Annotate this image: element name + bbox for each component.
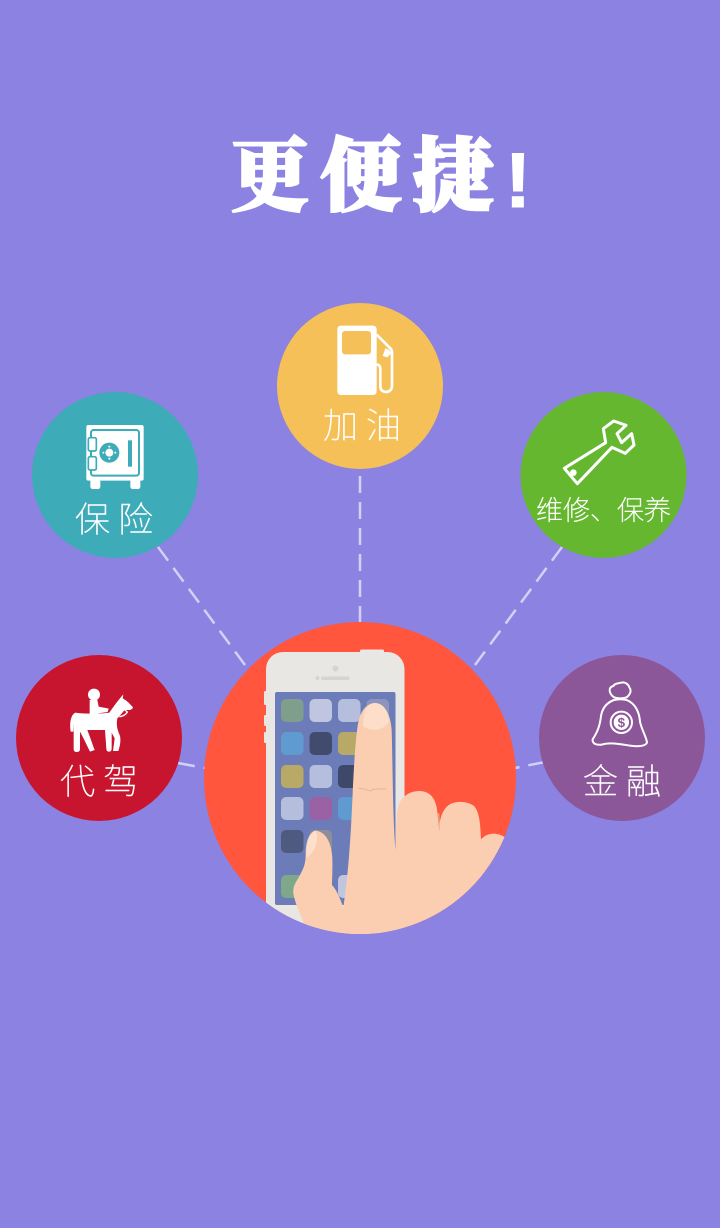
label: 代 xyxy=(60,763,95,802)
phone xyxy=(264,650,404,934)
circle: 加油: 油 xyxy=(366,407,401,446)
title: 便 xyxy=(321,134,401,222)
icon: horse and rider xyxy=(70,689,133,752)
icon: fuel pump xyxy=(337,326,392,395)
circle: 维修、保养 xyxy=(520,392,686,558)
central phone and hand illustration xyxy=(204,622,516,934)
circle: 金融 xyxy=(539,655,705,821)
dashed connector lines xyxy=(158,476,562,768)
circle: 金融: 融 xyxy=(626,763,661,802)
title xyxy=(230,134,531,224)
label: 保 xyxy=(75,501,110,540)
circle: 加油 xyxy=(277,303,443,469)
icon: money bag: $ xyxy=(618,715,626,730)
icon: wrench xyxy=(564,421,634,484)
circle: 保险: 险 xyxy=(118,501,153,540)
circle: 代驾: 驾 xyxy=(103,763,138,802)
title: 更 xyxy=(230,134,310,222)
hand xyxy=(293,703,520,940)
circle: 代驾 xyxy=(16,655,182,821)
label: 金 xyxy=(583,763,618,802)
title: 捷 xyxy=(413,134,493,222)
circle: 保险 xyxy=(32,392,198,558)
label: 加 xyxy=(323,407,358,446)
label: 维修、保养 xyxy=(536,496,671,526)
title: ! xyxy=(505,136,531,224)
icon: money bag xyxy=(593,682,647,746)
icon: safe xyxy=(86,425,144,489)
